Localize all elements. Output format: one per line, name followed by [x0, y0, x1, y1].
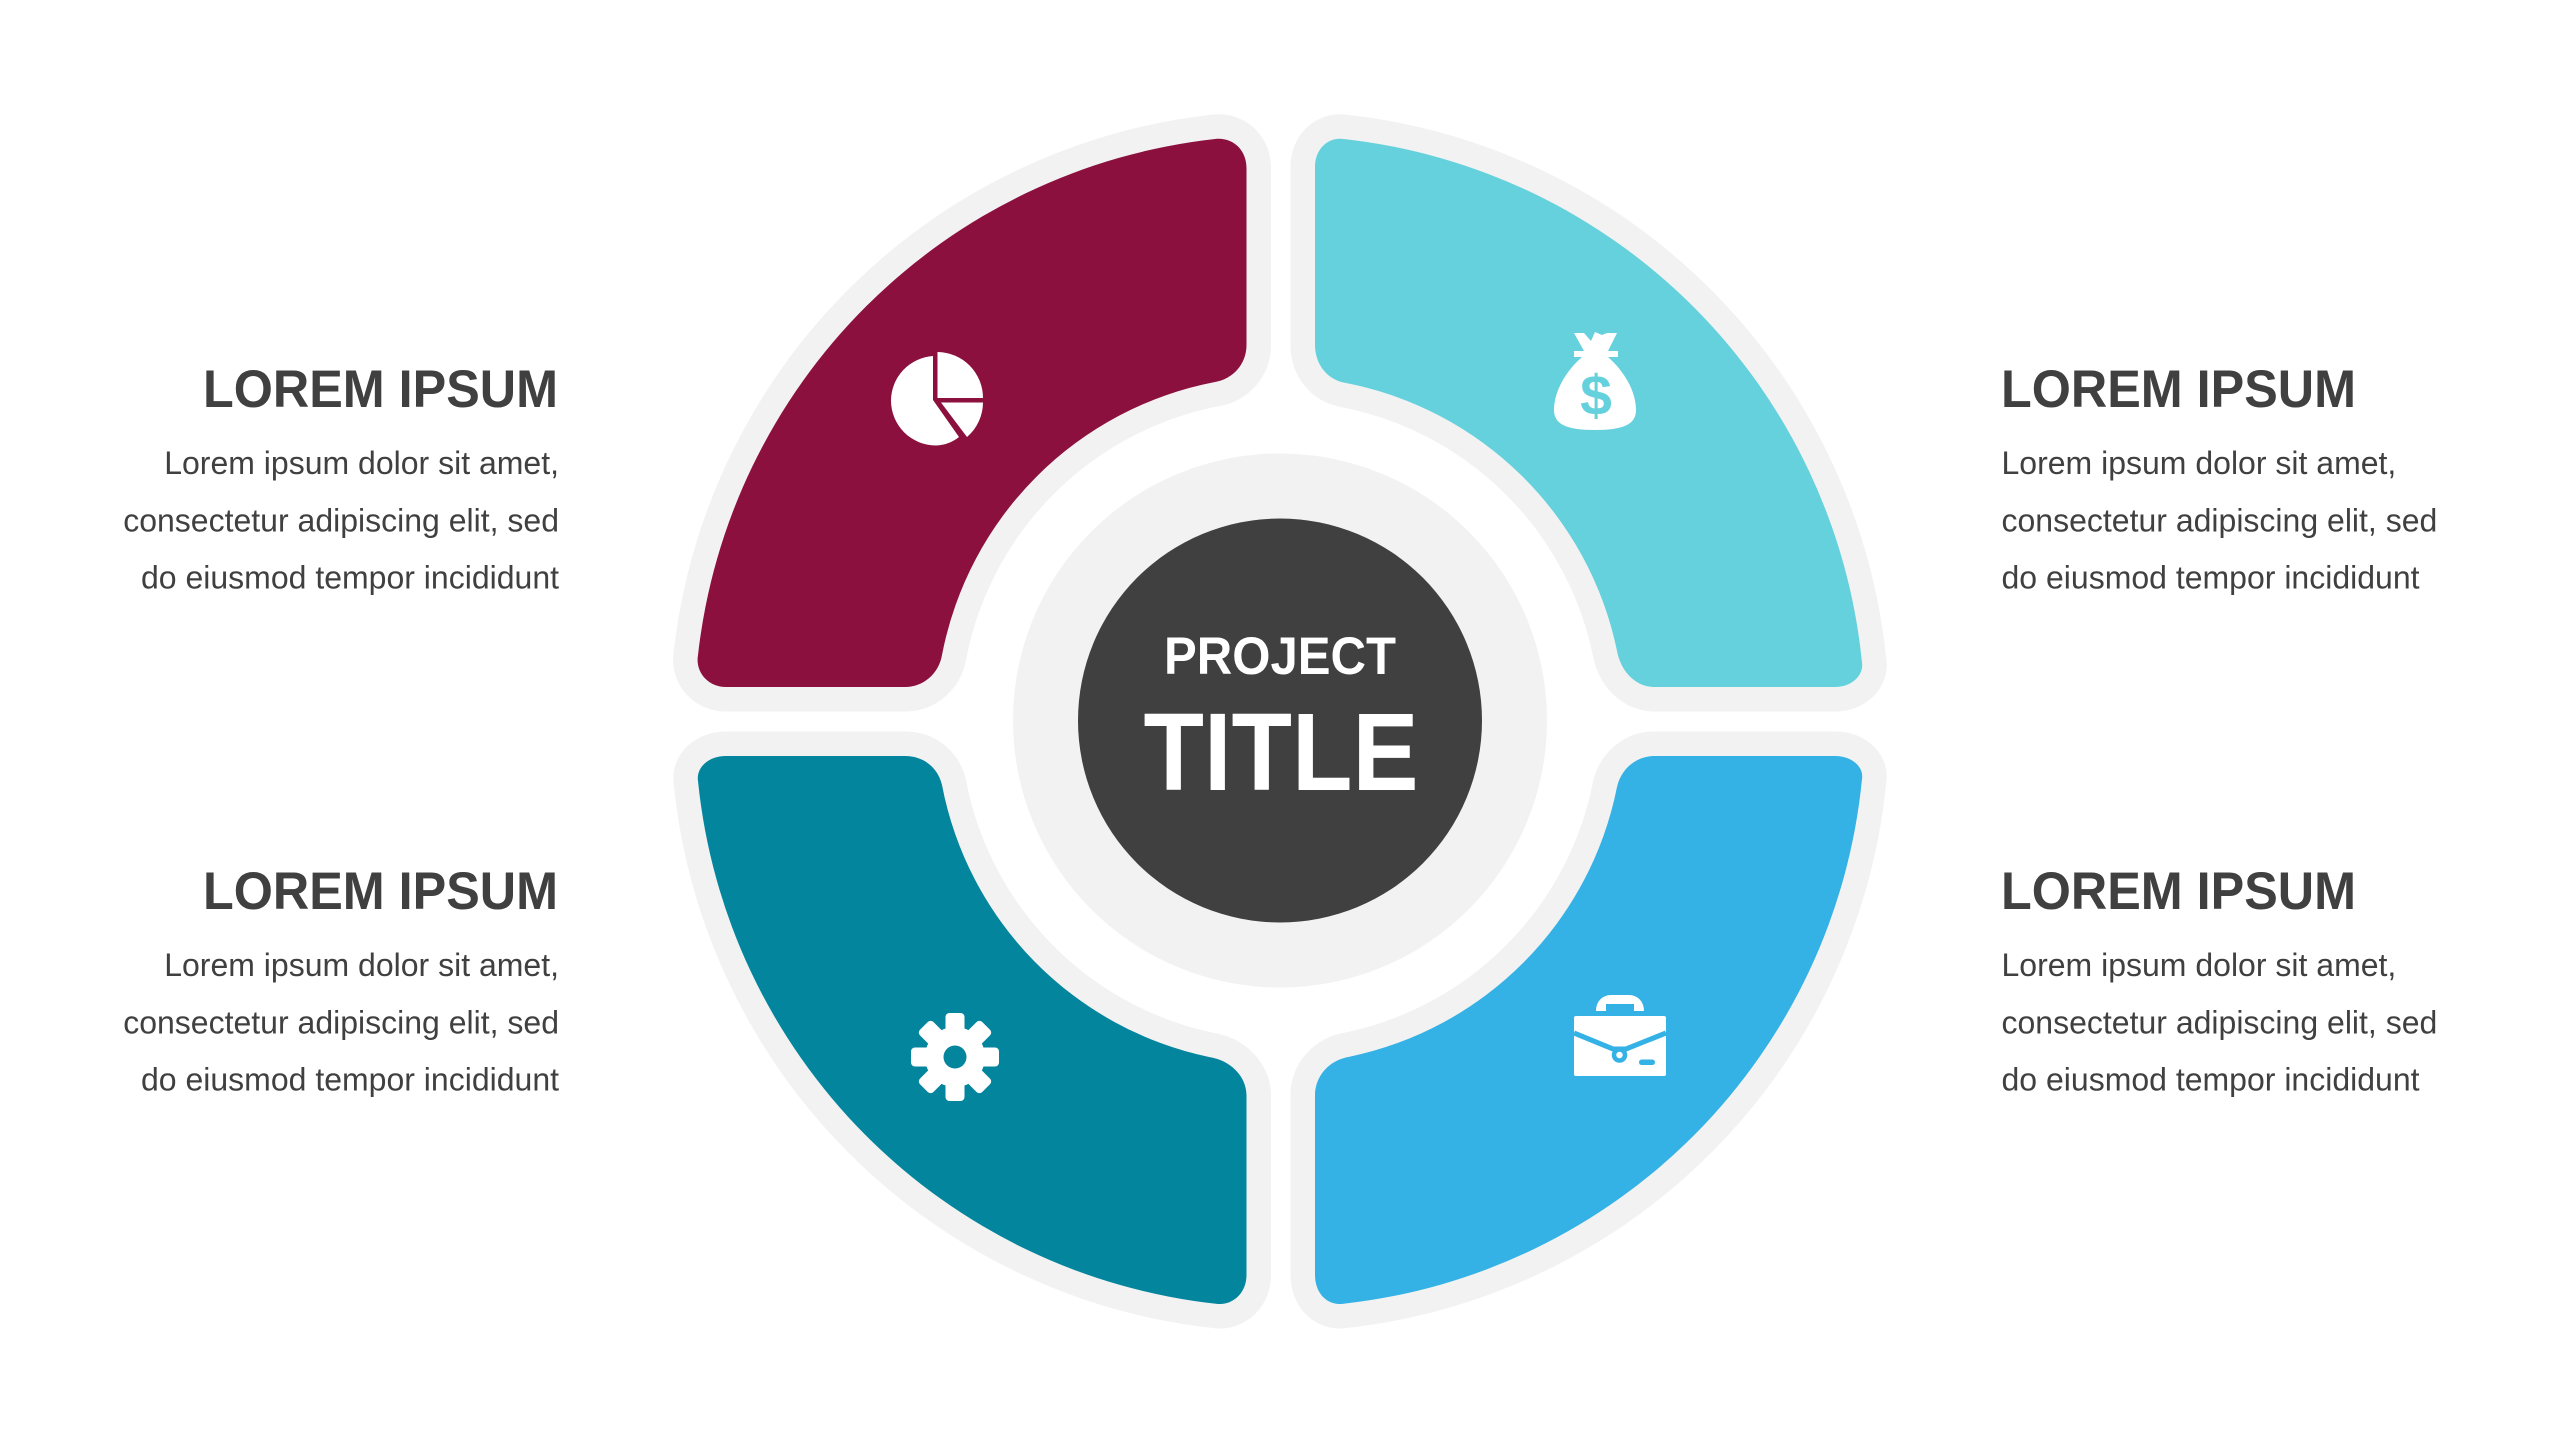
body copy: do eiusmod tempor incididunt — [141, 1062, 559, 1098]
text block: top right — [2001, 360, 2437, 596]
heading: LOREM IPSUM — [203, 862, 558, 921]
body copy — [123, 445, 559, 596]
segment: top-left crimson — [698, 139, 1246, 687]
body copy: do eiusmod tempor incididunt — [141, 560, 559, 596]
heading: LOREM IPSUM — [2001, 360, 2356, 419]
body copy: consectetur adipiscing elit, sed — [2002, 1004, 2437, 1040]
body copy: Lorem ipsum dolor sit amet, — [2002, 445, 2396, 481]
heading: LOREM IPSUM — [2001, 862, 2356, 921]
segment shape: crimson — [698, 139, 1246, 687]
body copy: consectetur adipiscing elit, sed — [123, 1004, 559, 1040]
body copy: consectetur adipiscing elit, sed — [123, 502, 559, 538]
text block: top left — [123, 360, 559, 596]
body copy: Lorem ipsum dolor sit amet, — [164, 947, 559, 983]
body copy: consectetur adipiscing elit, sed — [2002, 502, 2437, 538]
hub circle — [1078, 518, 1482, 922]
segment shape: sky blue — [1315, 756, 1862, 1304]
icon: pie chart — [891, 352, 983, 446]
center hub — [1078, 518, 1482, 922]
body copy: Lorem ipsum dolor sit amet, — [2002, 947, 2396, 983]
segment shape: teal — [698, 756, 1246, 1304]
body copy: do eiusmod tempor incididunt — [2002, 1062, 2420, 1098]
segment: bottom-right sky blue — [1315, 756, 1862, 1304]
segment: top-right light cyan — [1315, 139, 1862, 687]
icon: money bag — [1554, 332, 1636, 430]
segment: bottom-left teal — [698, 756, 1246, 1304]
title line: title: TITLE — [1144, 691, 1418, 814]
body copy: Lorem ipsum dolor sit amet, — [164, 445, 559, 481]
center halo ring — [1013, 454, 1547, 988]
body copy — [123, 947, 559, 1098]
text block: bottom right — [2001, 862, 2437, 1098]
heading: LOREM IPSUM — [203, 360, 558, 419]
body copy — [2002, 947, 2437, 1098]
body copy — [2002, 445, 2437, 596]
icon: gear — [911, 1013, 999, 1101]
body copy: do eiusmod tempor incididunt — [2002, 560, 2420, 596]
icon: money bag: $ — [1580, 364, 1612, 428]
title line: project: PROJECT — [1164, 627, 1396, 686]
segment shape: light cyan — [1315, 139, 1862, 687]
icon: briefcase — [1574, 995, 1666, 1076]
text block: bottom left — [123, 862, 559, 1098]
